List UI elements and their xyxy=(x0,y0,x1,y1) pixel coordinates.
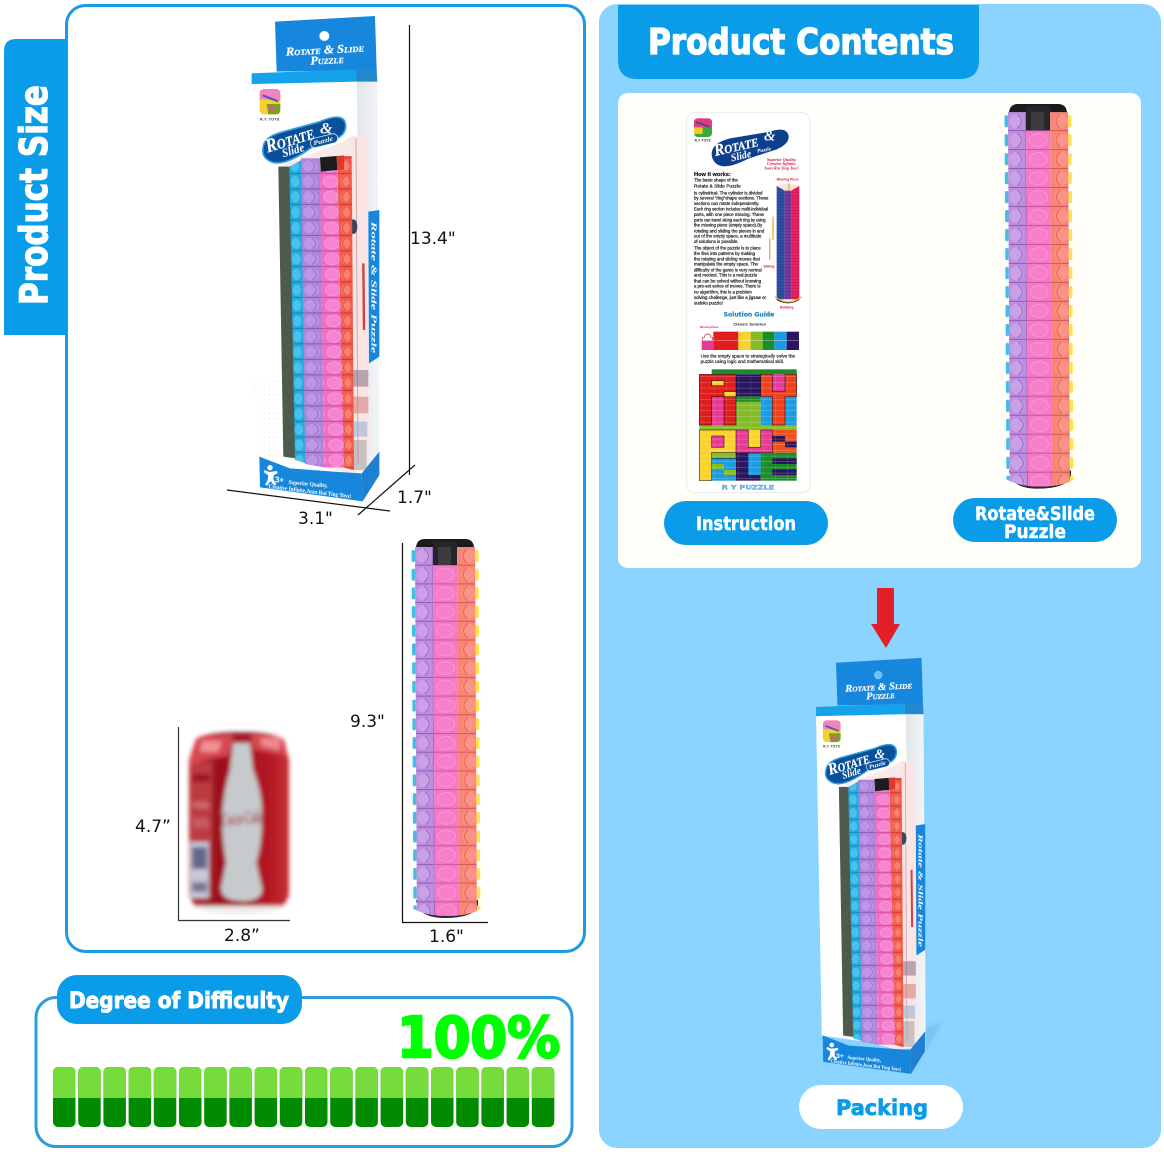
panel: product size xyxy=(4,6,584,952)
sheet slogan xyxy=(763,157,800,170)
box window xyxy=(278,137,369,473)
tab: product contents: Product Contents xyxy=(648,22,954,63)
how it works text: Each ring section includes multi-individual xyxy=(694,207,768,212)
tab: product contents xyxy=(618,5,979,79)
box hanger xyxy=(275,16,377,72)
box body xyxy=(816,704,926,1075)
how it works text: How it works: xyxy=(694,172,731,178)
sheet brand label: Slide xyxy=(730,149,753,164)
sheet brand label xyxy=(711,129,789,166)
how it works text: parts, with one piece missing. These xyxy=(694,212,765,217)
how it works text: no algorithm, this is a problem xyxy=(694,289,752,294)
how it works text: that can be solved without knowing xyxy=(694,278,762,283)
sheet brand label: Puzzle xyxy=(757,146,772,155)
dimension: puzzle height: 9.3" xyxy=(350,712,385,732)
button: rotate and slide puzzle xyxy=(953,498,1117,543)
box bottom band: Creative Infinite,Juan Rui Ying Toys! xyxy=(830,1058,902,1073)
box logo xyxy=(823,720,841,748)
box logo: R.Y. TOYS xyxy=(823,744,840,748)
sheet slogan: Superior Quality, xyxy=(767,157,796,162)
solution guide heading: Solution Guide xyxy=(724,312,774,319)
tab: difficulty label: Degree of Difficulty xyxy=(69,989,289,1014)
sheet slogan: Creative Infinite, xyxy=(767,161,796,166)
how it works text: Rotate & Slide Puzzle xyxy=(694,184,741,190)
value: 100 percent: 100% xyxy=(397,1006,560,1071)
how it works text xyxy=(694,172,769,305)
mini puzzle diagram: Sliding xyxy=(763,264,774,268)
button: instruction: Instruction xyxy=(696,513,796,535)
dimension: box width: 3.1" xyxy=(298,509,333,529)
button: packing: Packing xyxy=(836,1096,928,1120)
puzzle cylinder with dimensions xyxy=(350,539,488,922)
how it works text: of solutions is possible. xyxy=(694,239,739,244)
arrow: down to packing xyxy=(871,588,900,648)
box shadow xyxy=(910,1021,943,1075)
box brand label: Slide xyxy=(280,140,306,160)
box bottom band: Superior Quality, xyxy=(847,1055,882,1064)
dimension: box depth: 1.7" xyxy=(397,488,432,508)
how it works text: and modest. This is a real puzzle xyxy=(694,273,758,278)
tab: difficulty label xyxy=(57,975,302,1024)
box hanger xyxy=(836,658,923,706)
solution pattern grid xyxy=(699,369,797,481)
how it works text: The basic shape of the xyxy=(694,178,738,183)
how it works text: difficulty of the game is very normal xyxy=(694,267,762,272)
strategy text xyxy=(701,354,796,364)
box bottom band xyxy=(259,452,379,501)
instruction sheet xyxy=(687,113,810,493)
puzzle photo xyxy=(1003,104,1075,493)
how it works text: solving challenge, just like a jigsaw or xyxy=(694,295,766,300)
panel: product contents xyxy=(599,4,1161,1148)
dimension: box depth xyxy=(358,465,432,515)
classic solution strip xyxy=(700,322,799,350)
strategy text: puzzle using logic and mathematical skill. xyxy=(701,359,784,364)
sheet brand label: Rotate xyxy=(711,131,760,160)
panel frame xyxy=(36,998,572,1146)
box hanger: Puzzle xyxy=(866,690,895,703)
button: packing xyxy=(799,1085,963,1129)
product box with dimensions xyxy=(252,16,380,503)
dimension: box width xyxy=(227,490,390,529)
white contents card xyxy=(618,93,1141,568)
classic solution strip: Classic Solution xyxy=(733,322,767,326)
how it works text: by several "ring"shape sections. These xyxy=(694,196,769,201)
box brand label: & xyxy=(320,120,333,137)
how it works text: the missing piece (empty space).By xyxy=(694,223,763,228)
how it works text: The object of the puzzle is to place xyxy=(694,246,761,251)
box logo: R.Y. TOYS xyxy=(260,117,280,121)
box brand label: Rotate xyxy=(262,123,317,158)
box side label: Rotate & Slide Puzzle xyxy=(917,832,924,947)
mini puzzle diagram: Rotating xyxy=(780,306,793,310)
box bottom band: 3+ xyxy=(275,476,284,485)
panel background xyxy=(599,4,1161,1148)
sheet brand label: & xyxy=(764,129,776,145)
sheet logo xyxy=(694,118,712,143)
how it works text: rotating and sliding the pieces in and xyxy=(694,228,765,233)
box brand label: Puzzle xyxy=(868,761,887,771)
box bottom band: Superior Quality, xyxy=(288,480,328,489)
can logo text: Coca-Cola xyxy=(221,806,265,831)
soda can comparison xyxy=(135,727,290,946)
box brand label xyxy=(825,745,896,784)
dimension: can height: 4.7” xyxy=(135,817,171,837)
puzzle brand text: R Y PUZZLE xyxy=(722,484,774,491)
mini puzzle diagram xyxy=(763,178,802,310)
how it works text: parts can travel along each ring by using xyxy=(694,217,766,222)
how it works text: manipulate the empty space. The xyxy=(694,262,759,267)
sheet logo: R.Y. TOYS xyxy=(695,139,711,143)
tab: product size xyxy=(4,39,67,335)
box hanger title: Rotate & Slide xyxy=(284,41,364,59)
dimension: puzzle width: 1.6" xyxy=(429,927,464,947)
box brand label: Puzzle xyxy=(313,136,334,147)
classic solution strip: Missing Piece xyxy=(700,325,719,329)
sheet slogan: Juan Rui Ying Toys! xyxy=(763,165,800,170)
box body xyxy=(252,69,380,503)
box brand label: Rotate xyxy=(825,748,872,779)
box brand label xyxy=(262,117,346,163)
puzzle in box xyxy=(289,155,354,470)
how it works text: sudoku puzzle! xyxy=(694,300,723,305)
box hanger: Puzzle xyxy=(310,52,344,68)
box hanger: Rotate & Slide xyxy=(844,680,913,695)
panel: degree of difficulty xyxy=(36,975,572,1146)
box side label xyxy=(916,824,925,956)
box side label: Rotate & Slide Puzzle xyxy=(370,220,379,355)
how it works text: a pre-set series of moves. There is xyxy=(694,284,761,289)
progress bar xyxy=(53,1067,554,1127)
how it works text: sections can rotate independently. xyxy=(694,201,759,206)
box brand label: Slide xyxy=(841,766,863,782)
mini puzzle diagram: Missing Piece xyxy=(777,178,799,182)
box bottom band xyxy=(823,1031,925,1074)
button: instruction xyxy=(664,501,828,545)
packaged box photo xyxy=(816,658,943,1075)
box logo xyxy=(260,89,280,121)
icon: blurred can xyxy=(188,730,290,916)
button: rotate and slide puzzle: Rotate&Slide xyxy=(975,503,1095,525)
how it works text: the rotating and sliding moves that xyxy=(694,256,761,261)
how it works text: is cylindrical. The cylinder is divided xyxy=(694,190,763,195)
bottle silhouette xyxy=(221,743,262,901)
box side label xyxy=(368,210,379,363)
heading: product size: Product Size xyxy=(12,85,56,305)
dimension: box height: 13.4" xyxy=(410,229,456,249)
button: rotate and slide puzzle: Puzzle xyxy=(1004,521,1066,543)
icon: child figure xyxy=(264,465,278,486)
strategy text: Use the empty space to strategically solve the xyxy=(701,354,796,359)
how it works text: out of the empty space, a multitude xyxy=(694,234,762,239)
panel frame xyxy=(66,6,584,952)
dimension: can width: 2.8” xyxy=(224,926,260,946)
box bottom band: 3+ xyxy=(836,1053,844,1060)
box bottom band: Creative Infinite,Juan Rui Ying Toys! xyxy=(268,484,352,500)
puzzle in box xyxy=(848,777,904,1047)
how it works text: the tiles into patterns by making xyxy=(694,251,755,256)
box brand label: & xyxy=(874,746,885,761)
